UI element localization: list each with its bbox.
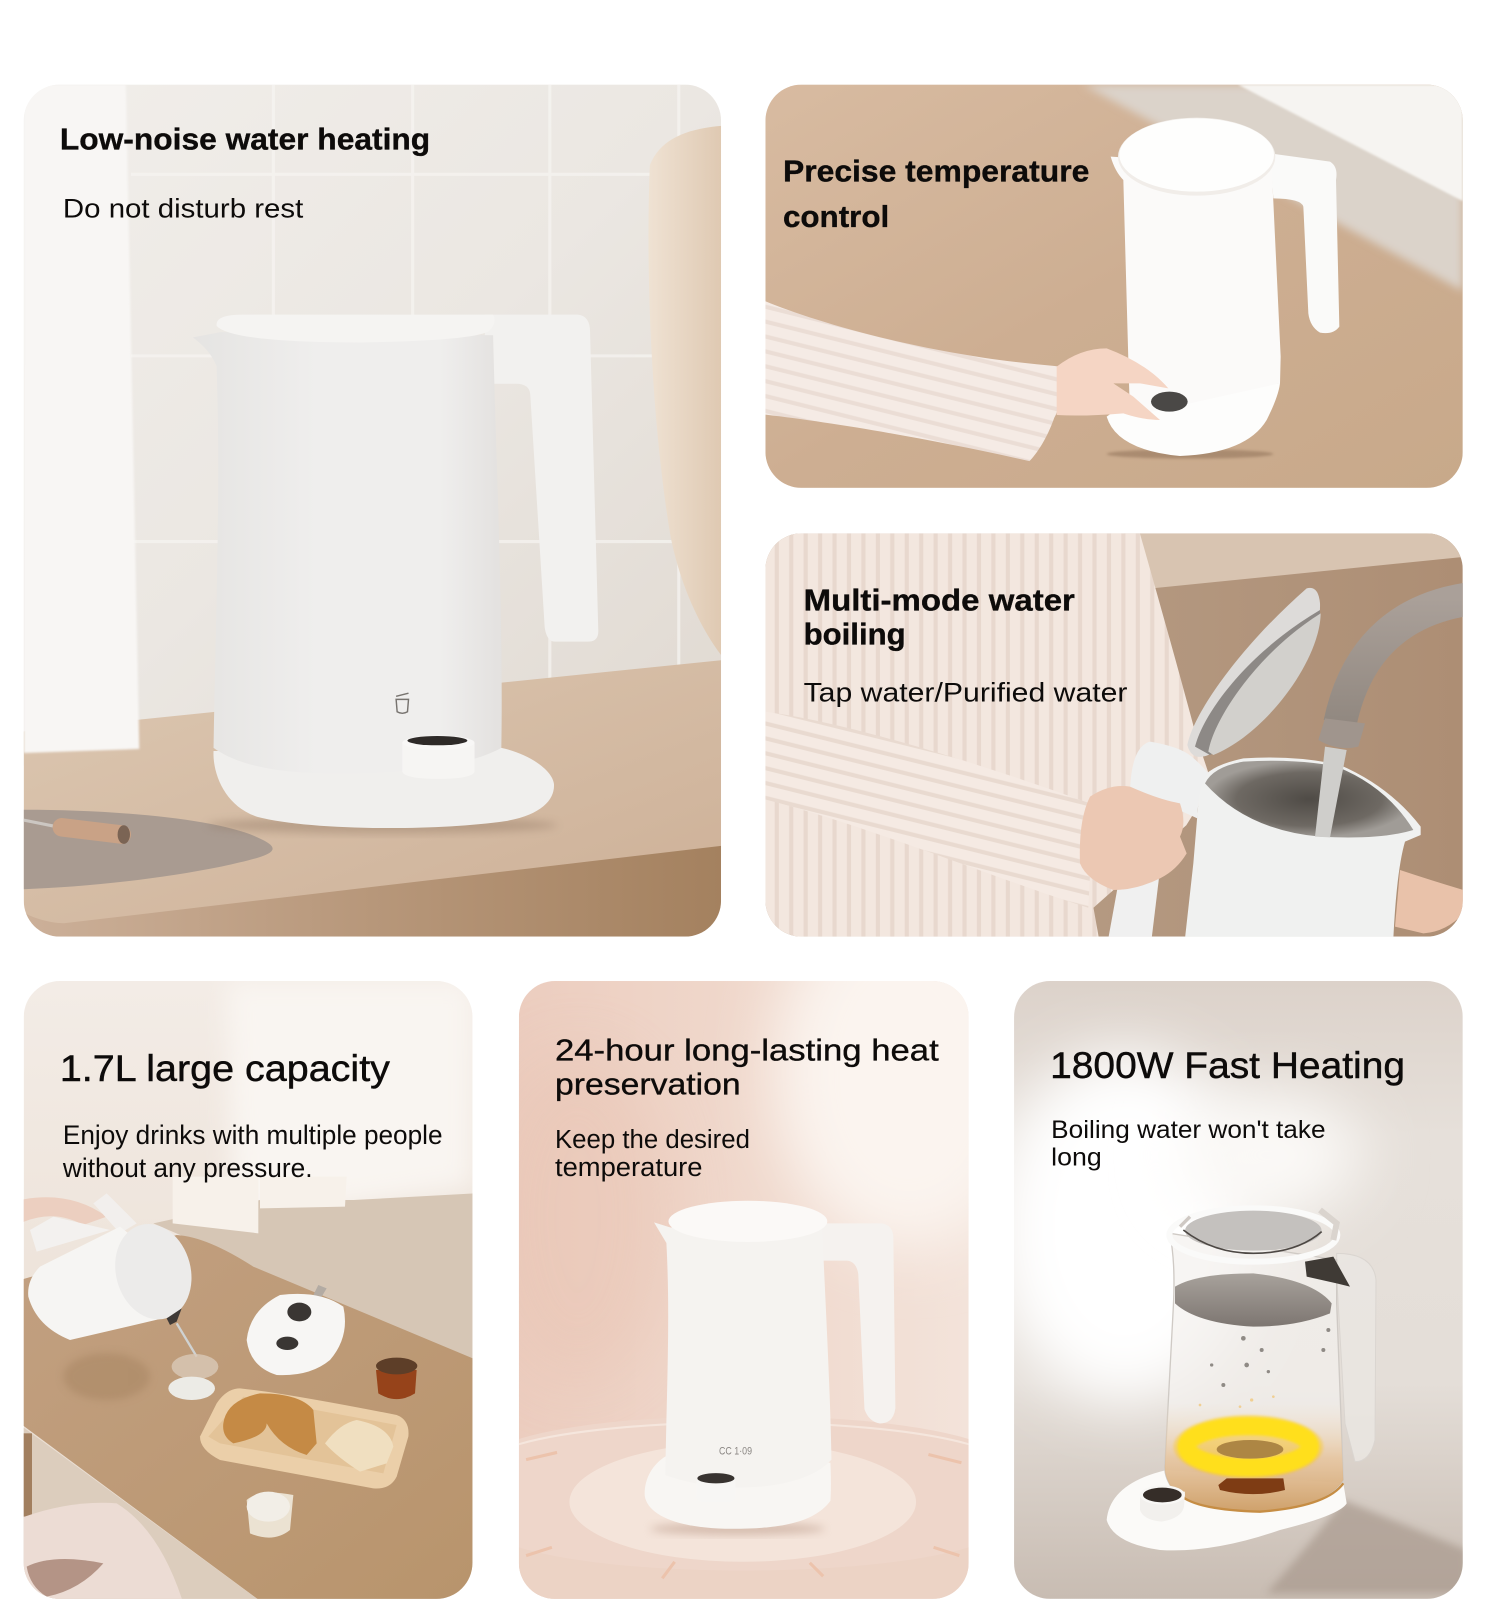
handle top bbox=[1130, 742, 1208, 818]
body bbox=[193, 332, 502, 774]
kettle shadow bbox=[1107, 449, 1273, 459]
beige curtain bbox=[648, 126, 721, 655]
glass handle bbox=[1337, 1253, 1376, 1462]
holding hand bbox=[1080, 786, 1187, 890]
kettle bbox=[645, 1201, 895, 1535]
hand and dial bbox=[1057, 348, 1188, 420]
amber rim bbox=[1180, 1483, 1343, 1512]
wooden table bbox=[765, 85, 1463, 488]
lid bbox=[1169, 1208, 1337, 1262]
handle bbox=[1270, 153, 1339, 333]
sweater bbox=[765, 533, 1212, 937]
tray bbox=[200, 1388, 409, 1489]
panel: precise temperature control bbox=[765, 85, 1463, 488]
kettle under faucet bbox=[1080, 588, 1473, 938]
white curtain bbox=[24, 85, 139, 753]
placemat bbox=[24, 810, 273, 889]
glass bbox=[168, 1354, 218, 1400]
base bbox=[1107, 383, 1280, 456]
handle bottom bbox=[1108, 875, 1159, 938]
glass body bbox=[1165, 1233, 1343, 1512]
kettle base bbox=[247, 1285, 345, 1375]
description line two: long bbox=[1051, 1145, 1102, 1172]
heading: Precise temperature bbox=[783, 154, 1089, 189]
curtain glow bbox=[227, 981, 472, 1217]
floor bbox=[153, 1193, 477, 1367]
heading: 24-hour long-lasting heat bbox=[555, 1032, 939, 1067]
pouring kettle bbox=[20, 1193, 202, 1357]
subheading: Do not disturb rest bbox=[63, 194, 304, 224]
room background bbox=[24, 981, 472, 1599]
panel: large capacity bbox=[20, 981, 477, 1603]
lid bbox=[1118, 118, 1275, 196]
description line two: without any pressure. bbox=[62, 1153, 313, 1183]
dial bbox=[696, 1473, 736, 1502]
lid bbox=[216, 315, 495, 342]
table top bbox=[24, 660, 721, 928]
kettle bbox=[1107, 118, 1339, 459]
panel: low-noise water heating bbox=[24, 85, 721, 937]
lid bbox=[1187, 588, 1321, 757]
lower floor bbox=[20, 1425, 263, 1603]
body bbox=[654, 1222, 831, 1488]
heating ring bbox=[1173, 1415, 1323, 1494]
dial bbox=[402, 736, 474, 765]
pink backdrop bbox=[485, 897, 1042, 1599]
table shadow bbox=[1267, 1500, 1467, 1593]
logo text: CC 1·09 bbox=[719, 1445, 752, 1457]
croissant bbox=[223, 1393, 317, 1455]
radiating ticks bbox=[526, 1452, 961, 1578]
resting hand bbox=[1395, 870, 1463, 933]
dial bbox=[1151, 392, 1188, 412]
pedestal bbox=[519, 1416, 969, 1599]
cup bbox=[247, 1492, 293, 1538]
tea basket bbox=[1175, 1273, 1332, 1327]
knife handle bbox=[24, 820, 130, 844]
hand bbox=[1057, 348, 1168, 420]
heading: Multi-mode water bbox=[804, 583, 1075, 618]
hand on chair bbox=[27, 1559, 103, 1597]
subheading: Tap water/Purified water bbox=[804, 677, 1128, 707]
wall with tiles bbox=[24, 85, 721, 765]
backdrop bbox=[990, 981, 1463, 1599]
curtain hem bbox=[173, 1177, 347, 1233]
base bbox=[1107, 1470, 1347, 1550]
description: Keep the desired bbox=[555, 1126, 750, 1154]
handle bbox=[820, 1223, 895, 1424]
lid bbox=[668, 1201, 827, 1242]
dark bracket bbox=[1305, 1257, 1350, 1287]
cabinet background bbox=[765, 533, 1463, 937]
body bbox=[1111, 157, 1281, 417]
glass kettle on base bbox=[1107, 1208, 1467, 1593]
logo bbox=[396, 693, 409, 713]
bubbles bbox=[1210, 1328, 1330, 1387]
liquid bbox=[1165, 1403, 1343, 1512]
base bbox=[213, 748, 554, 828]
dial bbox=[1140, 1485, 1185, 1522]
base bbox=[645, 1457, 831, 1529]
water stream bbox=[1315, 747, 1347, 837]
interior bbox=[1205, 761, 1413, 837]
heading line two: boiling bbox=[804, 617, 906, 652]
kettle body bbox=[1185, 757, 1421, 938]
panel: multi-mode water boiling bbox=[765, 533, 1473, 938]
panel: heat preservation bbox=[485, 897, 1042, 1599]
description: Boiling water won't take bbox=[1051, 1117, 1326, 1144]
table bbox=[20, 1235, 477, 1603]
bubbles glowing bbox=[1199, 1395, 1275, 1408]
description: Enjoy drinks with multiple people bbox=[63, 1120, 443, 1150]
heading line two: control bbox=[783, 199, 889, 234]
jar bbox=[376, 1358, 417, 1399]
kettle shadow bbox=[206, 817, 557, 833]
sleeve bbox=[765, 301, 1060, 461]
description line two: temperature bbox=[555, 1154, 703, 1182]
wall corner bbox=[1083, 85, 1463, 291]
heading: Low-noise water heating bbox=[60, 122, 430, 157]
heading line two: preservation bbox=[555, 1066, 741, 1101]
sweater arm bbox=[765, 712, 1093, 908]
table front edge bbox=[24, 846, 721, 937]
table scene bbox=[20, 1177, 477, 1603]
table shadow bbox=[63, 1353, 150, 1400]
biscuits bbox=[325, 1420, 393, 1472]
table leg bbox=[23, 1433, 32, 1517]
chair bbox=[20, 1503, 183, 1603]
heading: 1800W Fast Heating bbox=[1050, 1044, 1405, 1086]
kettle bbox=[193, 315, 598, 833]
heading: 1.7L large capacity bbox=[60, 1047, 390, 1089]
faucet bbox=[1318, 598, 1473, 748]
handle bbox=[485, 315, 598, 642]
panel: fast heating bbox=[990, 981, 1467, 1599]
